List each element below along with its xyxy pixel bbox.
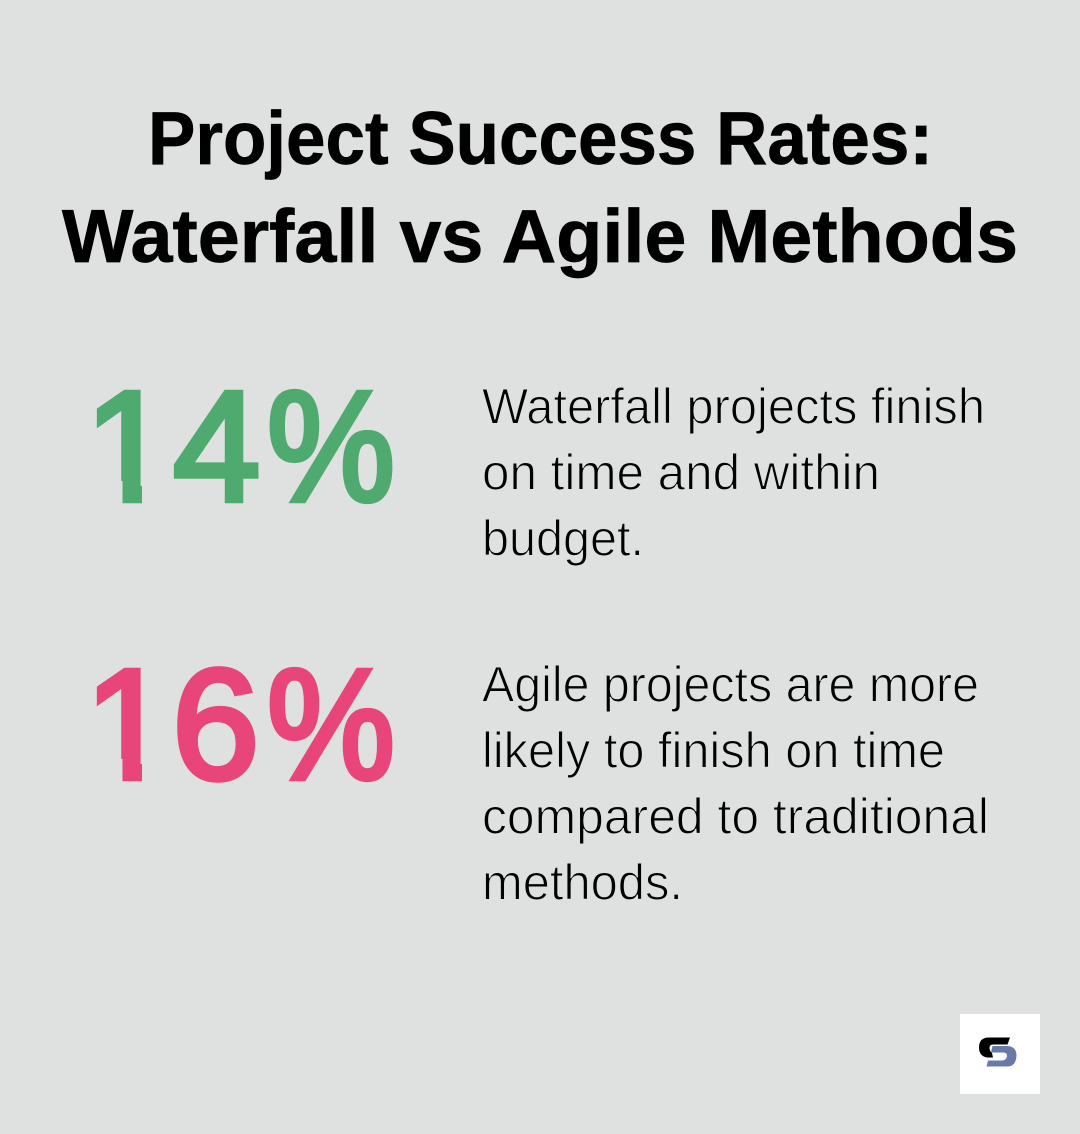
stat description: agile: Agile projects are more <box>482 656 979 712</box>
stat number: 14%: 1 <box>84 360 172 534</box>
stat number: 14%: 4 <box>173 360 260 534</box>
stat description: waterfall: Waterfall projects finish <box>482 378 985 434</box>
stat number: 14% <box>80 360 395 534</box>
title: Project Success Rates: <box>148 96 933 180</box>
stat description: agile: compared to traditional <box>482 788 989 844</box>
icon: logo S blue part <box>986 1046 1016 1066</box>
stat number: 16%: 1 <box>84 638 172 812</box>
icon: logo S black part <box>979 1038 1010 1058</box>
stat: 14% waterfall <box>80 360 985 566</box>
stat description: agile: methods. <box>482 854 683 910</box>
stat description: agile <box>482 656 989 910</box>
title <box>62 96 1018 278</box>
stat number: 16%: 6 <box>172 638 259 812</box>
title: Waterfall vs Agile Methods <box>62 194 1018 278</box>
stat: 16% agile <box>80 638 989 910</box>
stat description: waterfall <box>482 378 985 566</box>
stat number: 16% <box>80 638 395 812</box>
stat number: 14%: % <box>267 360 395 534</box>
stat description: waterfall: budget. <box>482 510 644 566</box>
stat description: agile: likely to finish on time <box>482 722 945 778</box>
logo badge <box>960 1014 1040 1094</box>
stat description: waterfall: on time and within <box>482 444 880 500</box>
stat number: 16%: % <box>267 638 395 812</box>
